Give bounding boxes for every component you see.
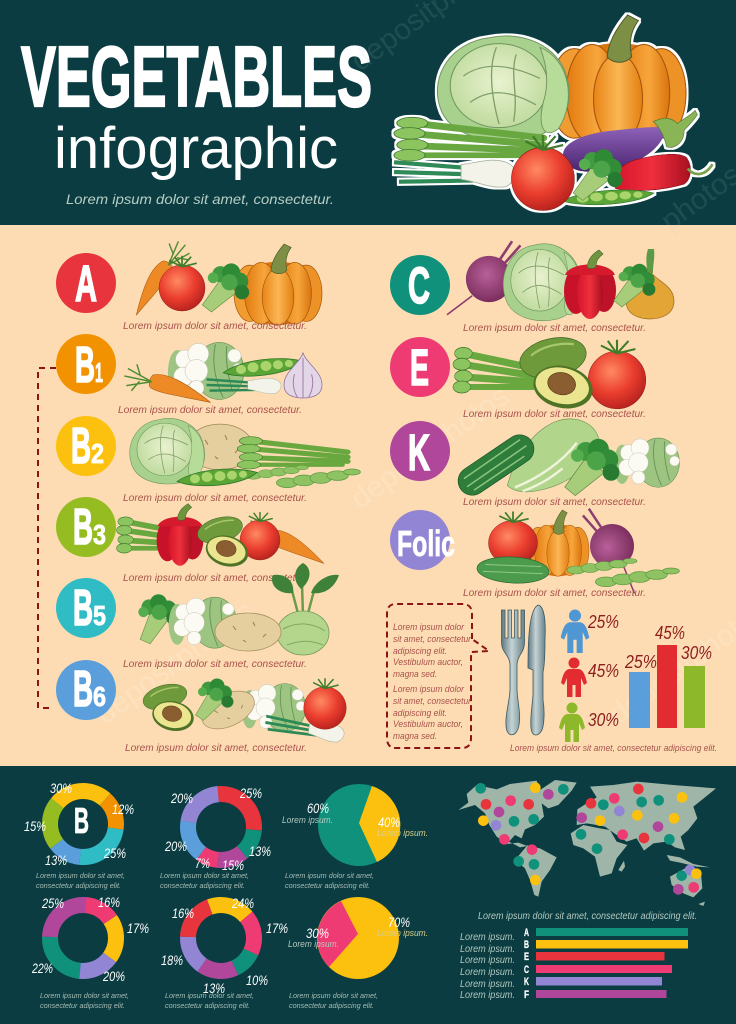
bar chart — [624, 623, 712, 728]
donut chart: B complex: 25% — [103, 845, 126, 861]
horizontal bar chart: E — [524, 951, 529, 963]
map caption: Lorem ipsum dolor sit amet, consectetur adipiscing elit. — [478, 910, 697, 922]
horizontal bar chart: K — [524, 976, 529, 988]
pie chart 70/30: 70% — [388, 914, 410, 930]
donut chart 3: 17% — [127, 920, 149, 936]
badge: vitamin E — [390, 337, 450, 397]
donut chart 4: 24% — [231, 895, 254, 911]
caption B1: Lorem ipsum dolor sit amet, consectetur. — [118, 404, 302, 416]
caption B6: Lorem ipsum dolor sit amet, consectetur. — [125, 742, 307, 754]
horizontal bar chart: F — [524, 989, 529, 1001]
donut chart 3 — [31, 892, 149, 984]
chart captions: consectetur adipiscing elit. — [160, 881, 245, 890]
caption A: Lorem ipsum dolor sit amet, consectetur. — [123, 320, 307, 332]
callout: dashed speech bubble: Lorem ipsum dolor — [393, 622, 465, 632]
callout: dashed speech bubble: Vestibulum auctor, — [393, 657, 463, 667]
badge: vitamin B5: 5 — [93, 600, 106, 631]
chart caption: Lorem ipsum dolor sit amet, consectetur adipiscing elit. — [510, 743, 717, 754]
pie chart 70/30: 30% — [306, 925, 329, 941]
footer panel — [0, 766, 736, 1024]
title: VEGETABLES — [21, 30, 372, 125]
vegetables: folic acid — [476, 508, 679, 593]
vegetables: vitamin B6 — [140, 677, 346, 743]
chart captions: consectetur adipiscing elit. — [165, 1001, 250, 1010]
badge: vitamin B5 — [56, 578, 116, 638]
badge: vitamin B3: 3 — [93, 519, 106, 550]
badge: folic acid: Folic — [397, 523, 455, 564]
donut chart 4: 17% — [266, 920, 288, 936]
icon: person red — [561, 658, 587, 697]
header panel — [0, 0, 736, 225]
vegetables: vitamin K — [453, 419, 679, 501]
icon: person green — [559, 702, 585, 742]
badge: vitamin K: K — [408, 424, 430, 481]
badge: vitamin B3: B — [73, 498, 93, 555]
caption B5: Lorem ipsum dolor sit amet, consectetur. — [123, 658, 307, 670]
donut chart 2: 20% — [170, 790, 193, 806]
caption folic: Lorem ipsum dolor sit amet, consectetur. — [463, 587, 646, 599]
donut chart: B complex — [24, 777, 134, 871]
label: 30 percent: 30% — [588, 710, 619, 730]
bar chart: 25% — [624, 652, 657, 672]
badge: vitamin B2: 2 — [91, 438, 104, 469]
donut chart 3: 22% — [31, 960, 53, 976]
horizontal bar chart: A — [524, 927, 529, 939]
caption B3: Lorem ipsum dolor sit amet, consectetur. — [123, 572, 307, 584]
icon: fork — [502, 610, 524, 735]
donut chart 2 — [164, 781, 271, 873]
badge: vitamin B3 — [56, 497, 116, 557]
badge: vitamin B2: B — [71, 417, 91, 474]
badge: vitamin K — [390, 421, 450, 481]
badge: vitamin B5: B — [73, 579, 93, 636]
vegetables: vitamin B1 — [122, 342, 322, 407]
chart captions: Lorem ipsum dolor sit amet, — [36, 871, 125, 880]
caption B2: Lorem ipsum dolor sit amet, consectetur. — [123, 492, 307, 504]
callout: dashed speech bubble: adipiscing elit. — [393, 708, 447, 718]
donut chart 4 — [161, 892, 288, 996]
bar chart: 45% — [655, 623, 685, 643]
chart captions: Lorem ipsum dolor sit amet, — [289, 991, 378, 1000]
badge: vitamin B6 — [56, 660, 116, 720]
donut chart: B complex: 15% — [24, 818, 46, 834]
chart captions: Lorem ipsum dolor sit amet, — [165, 991, 254, 1000]
vegetables: vitamin B5 — [130, 563, 339, 655]
badge: vitamin B1: 1 — [95, 357, 103, 388]
callout: dashed speech bubble: sit amet, consectetur — [393, 634, 472, 644]
vegetables: vitamin B3 — [116, 504, 331, 571]
caption C: Lorem ipsum dolor sit amet, consectetur. — [463, 322, 646, 334]
chart captions: consectetur adipiscing elit. — [285, 881, 370, 890]
label: 25 percent: 25% — [587, 612, 619, 632]
horizontal bar chart: B — [524, 939, 529, 951]
vegetables: vitamin E — [453, 332, 646, 414]
chart captions: Lorem ipsum dolor sit amet, — [160, 871, 249, 880]
badge: vitamin A: A — [75, 255, 97, 312]
callout: dashed speech bubble: Vestibulum auctor, — [393, 719, 463, 729]
badge: vitamin A — [56, 253, 116, 313]
chart captions: Lorem ipsum dolor sit amet, — [285, 871, 374, 880]
badge: folic acid — [390, 510, 455, 570]
caption E: Lorem ipsum dolor sit amet, consectetur. — [463, 408, 646, 420]
donut chart 2: 20% — [164, 838, 187, 854]
icon: knife — [528, 605, 545, 735]
donut chart 3: 20% — [102, 968, 125, 984]
donut chart 3: 16% — [98, 894, 120, 910]
callout: dashed speech bubble: adipiscing elit. — [393, 646, 447, 656]
callout: dashed speech bubble: sit amet, consectetur — [393, 696, 472, 706]
vegetables: vitamin C — [447, 241, 674, 321]
horizontal bar chart: C — [524, 964, 529, 976]
callout: dashed speech bubble: magna sed. — [393, 669, 437, 679]
pie chart 60/40: 60% — [307, 800, 329, 816]
icon: person blue — [561, 610, 589, 653]
badge: vitamin B6: B — [73, 660, 93, 717]
chart captions — [36, 871, 378, 1010]
horizontal bar chart: Lorem ipsum. — [460, 967, 515, 978]
donut chart 2: 15% — [222, 857, 244, 873]
vegetables: vitamin B2 — [130, 418, 360, 488]
badge: vitamin B1 — [56, 334, 116, 394]
illustration: vegetable pile — [394, 15, 712, 211]
horizontal bar chart — [460, 927, 688, 1001]
subtitle: infographic — [54, 116, 338, 181]
donut chart 2: 25% — [239, 785, 262, 801]
callout: dashed speech bubble: Lorem ipsum dolor — [393, 684, 465, 694]
donut chart 4: 10% — [246, 972, 268, 988]
watermarks: depositphotos — [90, 594, 260, 731]
pie chart 70/30: Lorem ipsum. — [288, 939, 339, 950]
chart captions: Lorem ipsum dolor sit amet, — [40, 991, 129, 1000]
pie chart 60/40 — [282, 784, 428, 866]
donut chart: B complex: 13% — [45, 852, 67, 868]
pie chart 60/40: 40% — [378, 814, 400, 830]
chart captions: consectetur adipiscing elit. — [40, 1001, 125, 1010]
donut chart 3: 25% — [41, 895, 64, 911]
pie chart 60/40: Lorem ipsum. — [377, 828, 428, 839]
chart captions: consectetur adipiscing elit. — [36, 881, 121, 890]
horizontal bar chart: Lorem ipsum. — [460, 932, 515, 943]
pie chart 60/40: Lorem ipsum. — [282, 815, 333, 826]
donut chart: B complex: 30% — [50, 780, 72, 796]
donut chart: B complex: B — [74, 800, 89, 841]
badge: vitamin C — [390, 255, 450, 315]
callout: dashed speech bubble: magna sed. — [393, 731, 437, 741]
donut chart 4: 16% — [172, 905, 194, 921]
pie chart 70/30: Lorem ipsum. — [377, 928, 428, 939]
horizontal bar chart: Lorem ipsum. — [460, 955, 515, 966]
world map with dots — [458, 780, 716, 906]
connector: B vitamins dashed bracket — [38, 368, 56, 708]
donut chart 2: 13% — [249, 843, 271, 859]
badge: vitamin C: C — [408, 257, 430, 314]
donut chart 2: 7% — [195, 855, 210, 871]
watermarks: depositphotos — [345, 379, 515, 516]
caption K: Lorem ipsum dolor sit amet, consectetur. — [463, 496, 646, 508]
badge: vitamin B1: B — [75, 336, 95, 393]
donut chart: B complex: 12% — [112, 801, 134, 817]
bar chart: 30% — [681, 643, 712, 663]
donut chart 4: 13% — [203, 980, 225, 996]
badge: vitamin E: E — [410, 339, 429, 396]
badge: vitamin B6: 6 — [93, 681, 106, 712]
chart captions: consectetur adipiscing elit. — [289, 1001, 374, 1010]
badge: vitamin B2 — [56, 416, 116, 476]
pie chart 70/30 — [288, 897, 428, 979]
tagline: Lorem ipsum dolor sit amet, consectetur. — [66, 191, 334, 207]
label: 45 percent: 45% — [588, 661, 619, 681]
callout: dashed speech bubble — [387, 604, 489, 748]
horizontal bar chart: Lorem ipsum. — [460, 944, 515, 955]
horizontal bar chart: Lorem ipsum. — [460, 979, 515, 990]
donut chart 4: 18% — [161, 952, 183, 968]
watermarks: depositphotos — [347, 814, 517, 951]
horizontal bar chart: Lorem ipsum. — [460, 990, 515, 1001]
vegetables: vitamin A — [120, 236, 322, 325]
